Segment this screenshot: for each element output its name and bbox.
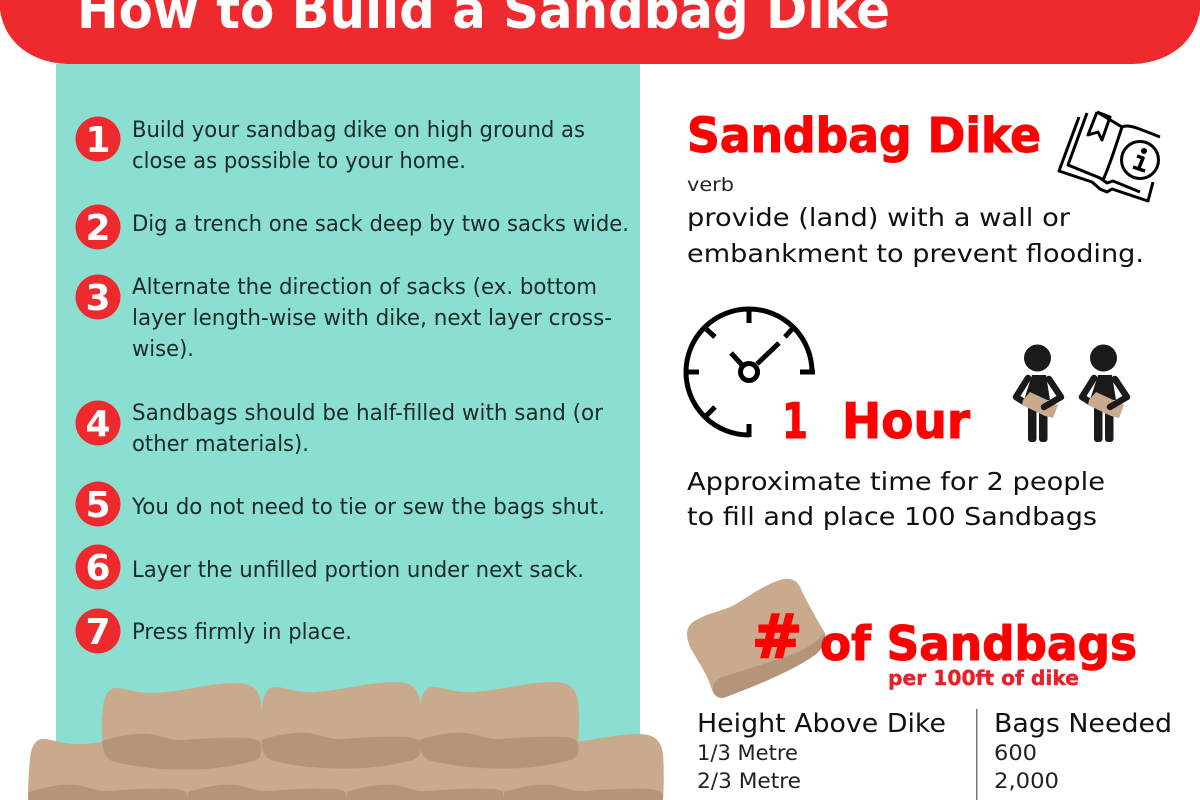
step 4: 4 (85, 404, 111, 445)
step 6: 6 (85, 548, 111, 589)
1 hour label: Hour (842, 393, 971, 450)
1 hour label (782, 393, 971, 450)
table: bags per height (697, 709, 1172, 800)
icon: second person carrying sandbag (1082, 344, 1127, 442)
step 3: layer length-wise with dike, next layer cross- (132, 306, 612, 331)
step 1: Build your sandbag dike on high ground as (132, 118, 585, 143)
step 4: other materials). (132, 432, 309, 457)
step 3: wise). (132, 337, 194, 362)
icon: person carrying sandbag (1016, 344, 1061, 442)
step 1: close as possible to your home. (132, 149, 466, 174)
column: bags: Bags Needed (994, 709, 1172, 739)
number of sandbags heading: of Sandbags (820, 617, 1137, 672)
title banner (0, 0, 1200, 64)
number of sandbags heading: # (752, 602, 802, 672)
step 7: 7 (85, 612, 111, 653)
step 1: 1 (85, 120, 111, 161)
definition text: provide (land) with a wall or (687, 203, 1071, 232)
step 6: Layer the unfilled portion under next sack. (132, 558, 584, 583)
panel: steps (56, 64, 640, 770)
step 5 (76, 482, 605, 526)
time description: Approximate time for 2 people (687, 467, 1105, 496)
column: bags (994, 709, 1172, 793)
step 2: Dig a trench one sack deep by two sacks wide. (132, 212, 629, 237)
step 5: 5 (85, 485, 111, 526)
column: height: 2/3 Metre (697, 769, 801, 793)
time description: to fill and place 100 Sandbags (687, 502, 1097, 531)
column: height: 1/3 Metre (697, 741, 798, 765)
step 3: Alternate the direction of sacks (ex. bottom (132, 275, 597, 300)
step 7 (76, 608, 352, 654)
1 hour label: 1 (782, 393, 808, 450)
definition text (687, 174, 1144, 268)
step 7: Press firmly in place. (132, 620, 352, 645)
column: height (697, 709, 946, 793)
sandbag wall (28, 682, 664, 800)
definition text: embankment to prevent flooding. (687, 239, 1144, 268)
step 2 (76, 204, 629, 250)
time description (687, 467, 1105, 531)
step 3: 3 (85, 278, 111, 319)
step 4 (76, 400, 604, 457)
step 6 (76, 544, 584, 590)
number of sandbags heading: per 100ft of dike (888, 666, 1079, 690)
step 1 (76, 116, 585, 174)
step 5: You do not need to tie or sew the bags shut. (131, 495, 605, 520)
number of sandbags heading (752, 602, 1137, 690)
icon: book with info (1059, 112, 1160, 201)
definition text: verb (687, 174, 734, 196)
column: bags: 2,000 (994, 769, 1059, 793)
column: bags: 600 (994, 741, 1037, 765)
step 3 (76, 274, 612, 362)
icon: sandbag (687, 579, 825, 698)
definition heading: Sandbag Dike (687, 108, 1041, 164)
column: height: Height Above Dike (697, 709, 946, 739)
icon: clock (686, 309, 815, 437)
step 2: 2 (85, 208, 111, 249)
step 4: Sandbags should be half-filled with sand (or (132, 401, 604, 426)
